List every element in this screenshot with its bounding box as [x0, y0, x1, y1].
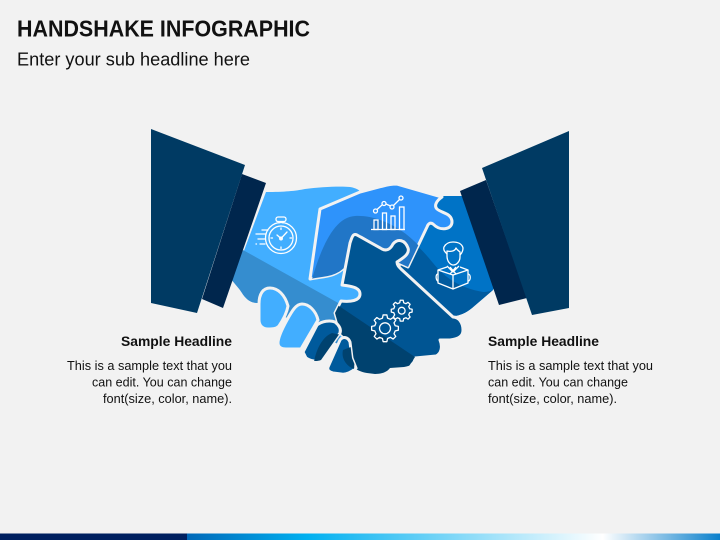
left text block [67, 333, 232, 406]
right headline: Sample Headline [488, 333, 599, 349]
top puzzle piece with chart icon [310, 184, 452, 290]
icon: person reading book [436, 242, 470, 289]
right body text: font(size, color, name). [488, 391, 617, 406]
finger 1 [259, 288, 288, 329]
finger 2 [278, 304, 318, 349]
right body text: can edit. You can change [488, 374, 628, 390]
left body text: font(size, color, name). [103, 391, 232, 406]
icon: bar chart with trend line [371, 196, 405, 230]
right body text [488, 358, 653, 406]
left headline: Sample Headline [121, 333, 232, 349]
icon: stopwatch [256, 217, 296, 254]
right hand piece with person icon [400, 196, 494, 316]
right sleeve [482, 131, 569, 315]
title: HANDSHAKE INFOGRAPHIC [17, 16, 310, 42]
left body text: This is a sample text that you [67, 358, 232, 373]
subtitle: Enter your sub headline here [17, 50, 250, 70]
finger 4 [328, 338, 356, 374]
left body text: can edit. You can change [92, 374, 232, 390]
icon: gears [372, 300, 412, 342]
left sleeve cuff [202, 174, 266, 308]
left sleeve [151, 129, 245, 313]
left body text [67, 358, 232, 406]
lower puzzle piece with gears icon [330, 234, 463, 380]
right sleeve cuff [460, 180, 527, 305]
right body text: This is a sample text that you [488, 358, 653, 373]
left hand palm [230, 187, 400, 345]
bottom colour bar [0, 534, 720, 540]
handshake illustration [151, 129, 569, 380]
finger 3 [303, 321, 342, 364]
right text block [488, 333, 653, 406]
